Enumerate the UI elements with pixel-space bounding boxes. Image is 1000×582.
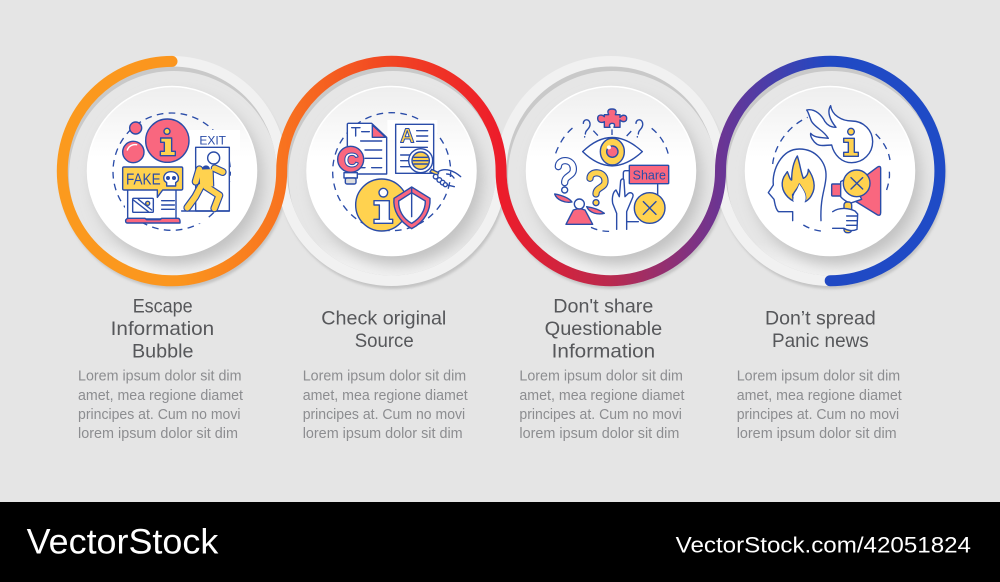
icon: escape information bubble: FAKE [126, 172, 161, 189]
text block: step 3: lorem ipsum dolor sit dim [519, 426, 679, 442]
text block: step 1 [78, 369, 243, 442]
text block: step 1: Lorem ipsum dolor sit dim [78, 369, 242, 385]
text block: step 1: principes at. Cum no movi [78, 407, 240, 423]
ring 4 base [715, 56, 946, 289]
heading: step 2: Source [355, 330, 414, 352]
text block: step 4: principes at. Cum no movi [737, 407, 899, 423]
ring 1 base [57, 56, 288, 289]
text block: step 2 [303, 369, 468, 442]
heading: step 1: Information [111, 318, 214, 340]
heading: step 1 [111, 296, 214, 363]
heading: step 4: Don’t spread [765, 308, 876, 330]
footer bar: VectorStock [27, 523, 219, 562]
gradient ribbon connecting all steps [62, 61, 940, 281]
text block: step 1: lorem ipsum dolor sit dim [78, 426, 238, 442]
icon: don't share questionable information: Share [633, 167, 666, 182]
heading: step 1: Escape [133, 296, 193, 318]
text block: step 4: lorem ipsum dolor sit dim [737, 426, 897, 442]
icon: check original source: C [344, 149, 359, 172]
text block: step 4: Lorem ipsum dolor sit dim [737, 369, 900, 385]
text block: step 4 [737, 369, 902, 442]
heading: step 3: Information [552, 341, 655, 363]
heading: step 3: Questionable [545, 318, 662, 340]
text block: step 3 [519, 369, 684, 442]
heading: step 3 [545, 296, 662, 363]
heading: step 2: Check original [321, 308, 446, 330]
heading: step 3: Don't share [553, 296, 653, 318]
heading: step 4 [765, 308, 876, 352]
icon: check original source: A [400, 125, 414, 147]
heading: step 1: Bubble [132, 341, 194, 363]
icon: don't share questionable information [555, 109, 669, 231]
heading: step 4: Panic news [772, 330, 869, 352]
text block: step 2: lorem ipsum dolor sit dim [303, 426, 463, 442]
text block: step 2: amet, mea regione diamet [303, 388, 468, 404]
text block: step 1: amet, mea regione diamet [78, 388, 243, 404]
ring 2 base [276, 56, 508, 289]
icon: escape information bubble: EXIT [199, 134, 227, 148]
icon: escape information bubble [113, 113, 240, 230]
text block: step 2: Lorem ipsum dolor sit dim [303, 369, 466, 385]
text block: step 3: amet, mea regione diamet [519, 388, 684, 404]
ring 3 base [496, 56, 727, 289]
footer bar [0, 502, 1000, 582]
text block: step 3: principes at. Cum no movi [519, 407, 682, 423]
text block: step 2: principes at. Cum no movi [303, 407, 465, 423]
text block: step 4: amet, mea regione diamet [737, 388, 902, 404]
heading: step 2 [321, 308, 446, 352]
icon: check original source [333, 113, 461, 231]
icon: don't spread panic news [768, 106, 890, 233]
text block: step 3: Lorem ipsum dolor sit dim [519, 369, 683, 385]
footer bar: VectorStock.com/42051824 [676, 532, 971, 557]
